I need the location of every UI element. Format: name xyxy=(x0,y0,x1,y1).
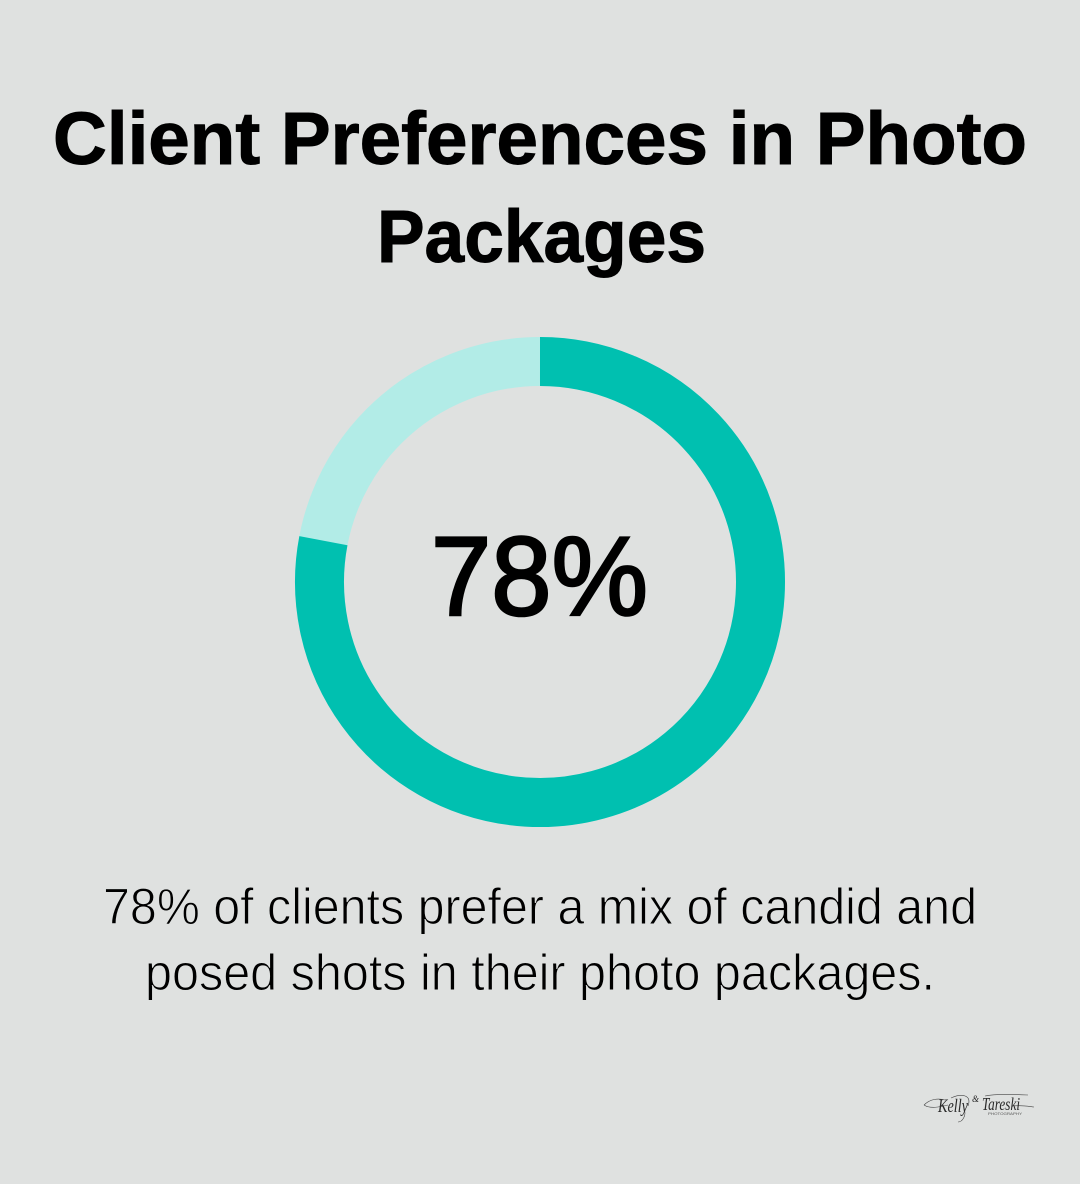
signature name: Kelly xyxy=(937,1096,968,1117)
signature surname: Tareski xyxy=(982,1094,1020,1114)
description text xyxy=(103,878,977,1001)
title: Packages xyxy=(377,195,706,278)
signature logo xyxy=(924,1094,1034,1122)
description text: 78% of clients prefer a mix of candid and xyxy=(103,878,977,935)
signature flourish strokes xyxy=(924,1094,1034,1122)
title: Client Preferences in Photo xyxy=(53,97,1027,180)
remaining 22 percent segment xyxy=(320,362,760,802)
donut chart: 78 percent xyxy=(319,362,760,802)
signature ampersand: & xyxy=(972,1094,979,1104)
donut centre value: 78% xyxy=(431,514,648,639)
78 percent segment xyxy=(319,362,760,802)
signature subtitle: PHOTOGRAPHY xyxy=(988,1112,1023,1116)
description text: posed shots in their photo packages. xyxy=(145,944,935,1001)
title xyxy=(53,97,1027,278)
